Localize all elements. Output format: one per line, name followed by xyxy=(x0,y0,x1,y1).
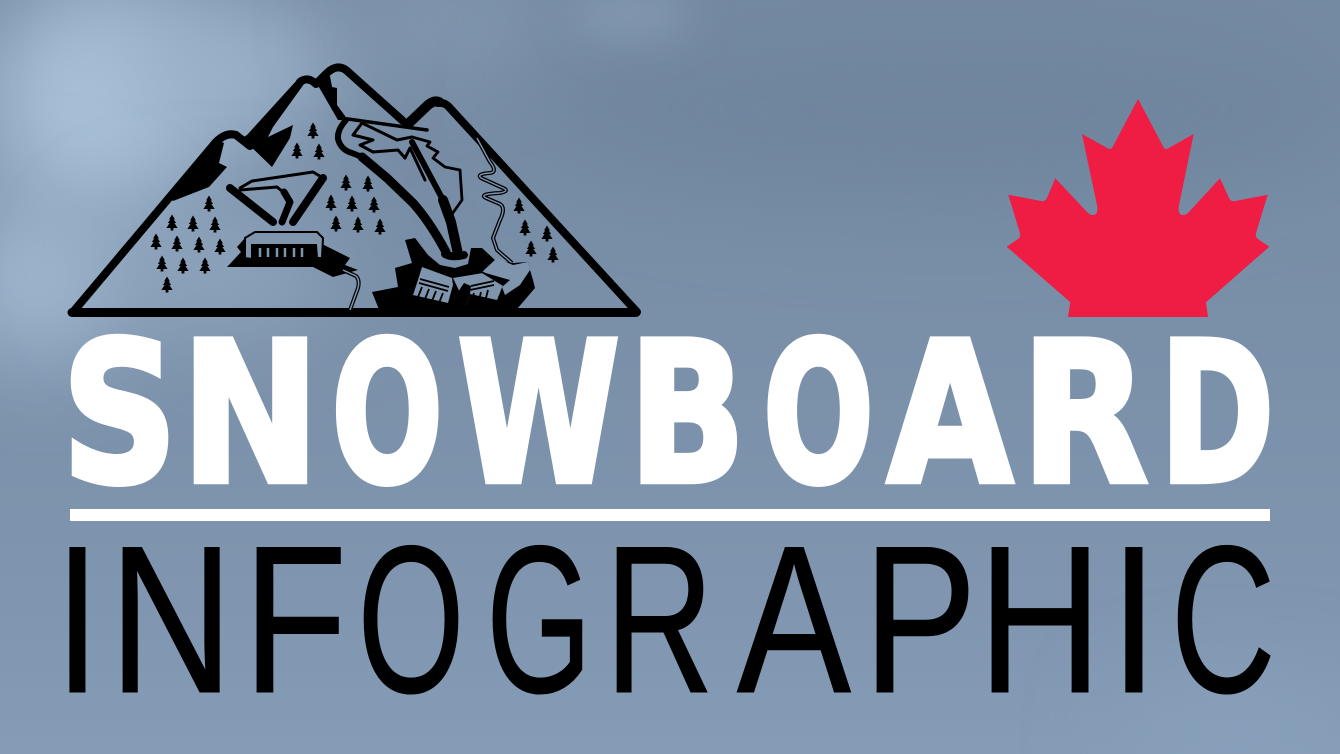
mountain ridge shadows xyxy=(170,140,227,201)
title: SNOWBOARD: W xyxy=(458,301,620,527)
evergreen trees xyxy=(150,122,559,292)
subtitle: INFOGRAPHIC: I xyxy=(55,502,100,737)
subtitle: INFOGRAPHIC: H xyxy=(978,502,1102,737)
subtitle: INFOGRAPHIC: A xyxy=(737,502,851,737)
winding road right xyxy=(477,138,512,263)
subtitle: INFOGRAPHIC: G xyxy=(486,502,592,737)
left lodge xyxy=(227,232,358,277)
left lift runs xyxy=(230,172,323,222)
mountain outline xyxy=(72,67,637,312)
title: SNOWBOARD: D xyxy=(1160,301,1274,527)
subtitle: INFOGRAPHIC: O xyxy=(358,502,465,737)
title: SNOWBOARD: O xyxy=(332,301,443,527)
access road left xyxy=(343,270,359,310)
title: SNOWBOARD: B xyxy=(629,301,745,527)
subtitle: INFOGRAPHIC: I xyxy=(1110,502,1158,737)
icon: mountain resort logo xyxy=(72,67,637,312)
title: SNOWBOARD: S xyxy=(62,301,177,527)
village buildings xyxy=(372,238,535,312)
divider rule xyxy=(70,509,1270,521)
title: SNOWBOARD: A xyxy=(888,301,1012,527)
subtitle: INFOGRAPHIC: P xyxy=(863,502,977,737)
icon: red maple leaf xyxy=(1007,99,1269,317)
subtitle: INFOGRAPHIC: F xyxy=(243,502,347,737)
ski runs xyxy=(338,119,464,256)
title: SNOWBOARD: O xyxy=(763,301,874,527)
title: SNOWBOARD: N xyxy=(181,301,320,527)
subtitle: INFOGRAPHIC: R xyxy=(605,502,714,737)
subtitle: INFOGRAPHIC: C xyxy=(1171,502,1276,737)
title: SNOWBOARD: R xyxy=(1021,301,1148,527)
subtitle: INFOGRAPHIC: N xyxy=(109,502,233,737)
